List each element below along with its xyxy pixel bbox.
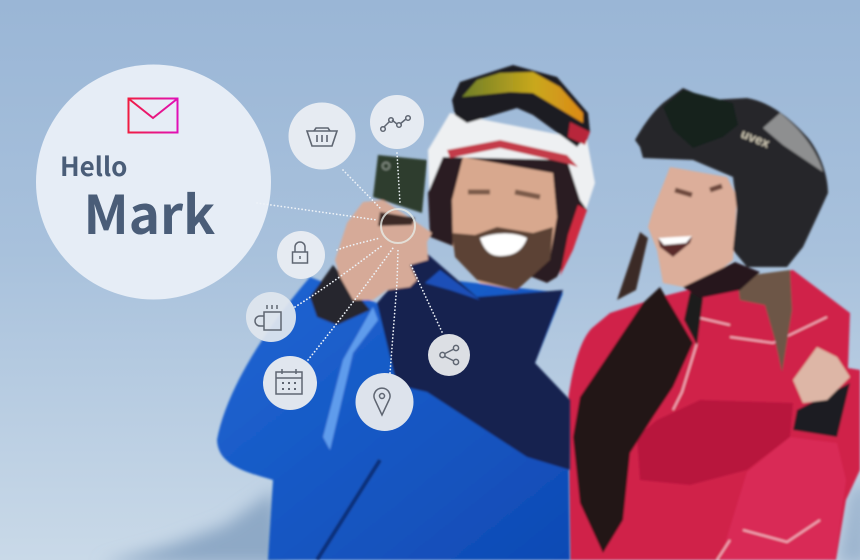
face: [648, 167, 737, 287]
hair: [617, 232, 648, 300]
icon: share: [428, 334, 470, 376]
phone: [373, 155, 427, 213]
helmet logo: uvex: [739, 126, 773, 151]
text: Hello: Hello: [60, 147, 127, 184]
neck scarf: [683, 262, 760, 298]
text: Mark: Mark: [84, 174, 215, 250]
jacket: [217, 277, 570, 560]
icon: padlock: [277, 231, 325, 279]
photo: man skier: [217, 65, 595, 560]
face: [452, 157, 557, 290]
icon: map pin: [356, 373, 414, 431]
dotted connector lines: [257, 153, 442, 373]
cuff: [310, 265, 370, 325]
fist and cuff: [793, 383, 850, 437]
icon: line chart: [370, 95, 424, 149]
icon: envelope: [128, 98, 178, 132]
icon: basket: [288, 102, 356, 170]
icon: coffee mug: [246, 292, 296, 342]
helmet: [428, 113, 595, 283]
icon: calendar: [263, 356, 317, 410]
greeting circle: [36, 64, 271, 300]
jacket: [568, 270, 860, 560]
phone focus ring: [381, 209, 415, 243]
photo: woman skier: [568, 88, 860, 560]
hand: [335, 200, 432, 300]
goggles: [452, 65, 590, 147]
helmet: [635, 88, 828, 267]
